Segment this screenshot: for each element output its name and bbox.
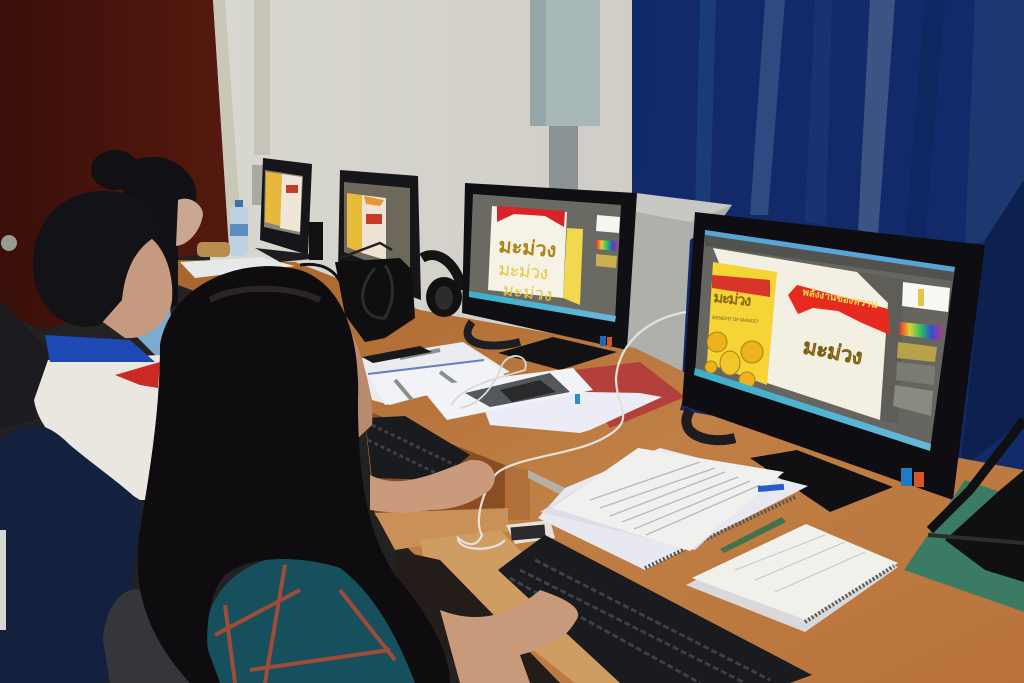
desk surface [178, 260, 1024, 683]
electrical box [530, 0, 600, 190]
chair floor strip [0, 530, 6, 630]
body [682, 212, 985, 500]
phone [362, 346, 432, 363]
notebook right [686, 524, 898, 632]
papers and snack at far desk [180, 242, 295, 278]
red folder [573, 362, 685, 428]
monitor third: มะม่วง [502, 280, 553, 305]
taskbar [694, 368, 931, 451]
monitor second [338, 170, 421, 300]
cabinet [628, 193, 732, 380]
keyboards [498, 535, 812, 683]
dark gap beneath desk [395, 550, 560, 683]
green folder [904, 480, 1024, 612]
keyboard rear [365, 416, 470, 480]
curtain [632, 0, 1024, 480]
wall [210, 0, 640, 350]
document stack front [506, 448, 808, 570]
white phone [506, 520, 555, 544]
lower notebook [538, 448, 808, 570]
top toolbar [705, 230, 955, 272]
screen [695, 230, 955, 450]
office badge [914, 472, 924, 487]
face [100, 233, 172, 338]
thai title text: มะม่วง [498, 235, 557, 262]
poster banner [712, 275, 770, 297]
blue clip pen [758, 484, 784, 492]
sheets [540, 450, 770, 550]
poster heading: BENEFIT OF MANGO [712, 315, 758, 325]
hair [137, 266, 450, 683]
black bag right [928, 420, 1024, 582]
front chair back [103, 589, 200, 683]
white cable [458, 312, 686, 549]
blue pen [575, 394, 580, 404]
green pen [720, 517, 786, 553]
stand [498, 337, 617, 370]
poster title: มะม่วง [713, 289, 752, 310]
shirt [34, 355, 170, 500]
front student [137, 266, 578, 683]
earphone cable [452, 356, 526, 408]
right panels [857, 272, 905, 424]
left student forearm [370, 460, 495, 513]
water bottle [230, 200, 248, 256]
panel content [902, 282, 950, 312]
door frame [213, 0, 242, 248]
screen [469, 194, 621, 320]
navy chair [0, 425, 142, 683]
poster circles [705, 332, 763, 388]
monitor third: มะม่วง [498, 259, 549, 283]
left student [33, 191, 172, 500]
papers by third monitor [362, 342, 685, 433]
collar [45, 335, 155, 362]
red ribbon banner [788, 285, 890, 335]
monitor far left [255, 158, 323, 262]
loose sheets [477, 390, 662, 433]
wall pipe and sockets [252, 0, 270, 205]
desk front edge [365, 410, 650, 683]
poster yellow [707, 262, 777, 385]
monitor large [682, 212, 985, 512]
back student [91, 150, 203, 360]
logos [600, 336, 606, 346]
right arm [440, 590, 578, 683]
stand [750, 450, 893, 512]
garment [205, 555, 440, 683]
left chair back [0, 300, 50, 430]
headphones [422, 255, 462, 317]
artboard white [713, 248, 888, 420]
monitor third [462, 183, 637, 370]
door handle [1, 235, 17, 251]
banner text: พลังงานของหวาน [801, 286, 879, 311]
hair [33, 191, 160, 327]
handbag [300, 243, 415, 342]
face sliver [345, 320, 372, 440]
door [0, 0, 229, 330]
intel badge [901, 468, 912, 486]
white booklet [362, 342, 510, 405]
body [462, 183, 637, 350]
word mango: มะม่วง [801, 335, 864, 369]
